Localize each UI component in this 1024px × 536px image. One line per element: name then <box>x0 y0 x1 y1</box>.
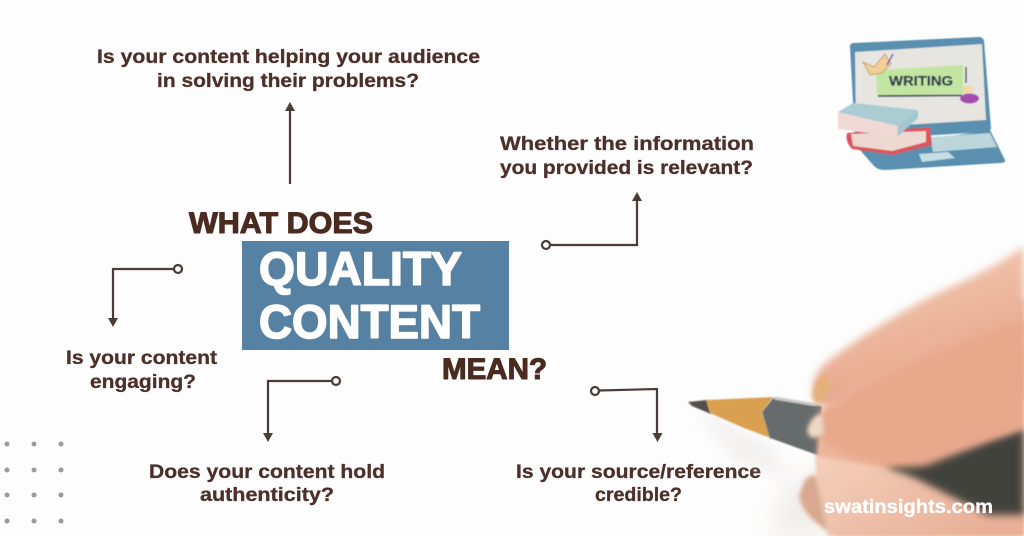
middle finger and hand back <box>810 320 1024 467</box>
arrow: to authenticity <box>263 377 340 442</box>
paper shadow below hand <box>770 470 830 536</box>
question: relevant information <box>500 134 754 179</box>
blue book pages <box>838 112 898 137</box>
red book <box>847 127 932 155</box>
heading: mean: MEAN? <box>442 353 547 386</box>
question: credible source: credible? <box>595 485 682 506</box>
pencil body <box>762 398 822 456</box>
middle fingernail <box>807 414 824 438</box>
index finger <box>813 246 1024 408</box>
panel: quality content: CONTENT <box>259 295 480 348</box>
question: authenticity <box>149 462 385 506</box>
finger crease <box>828 300 1024 408</box>
arrow: to engaging <box>108 265 182 327</box>
arrow: up to helping audience <box>285 102 295 184</box>
pencil highlight <box>774 398 816 405</box>
website label: swatinsights.com <box>824 497 993 518</box>
ink pot <box>960 94 979 104</box>
question: authenticity: Does your content hold <box>149 462 385 483</box>
hand base <box>816 300 1024 536</box>
dark pencil shaft <box>885 428 1024 515</box>
question: credible source: Is your source/reference <box>516 462 761 483</box>
panel: quality content <box>242 241 509 350</box>
question: authenticity: authenticity? <box>200 485 334 506</box>
heading: what does: WHAT DOES <box>189 207 373 240</box>
small book <box>863 54 891 75</box>
question: engaging: Is your content <box>66 348 218 369</box>
arrow: to credible source <box>591 387 662 442</box>
keyboard <box>930 133 997 152</box>
question: engaging <box>66 348 218 393</box>
question: engaging: engaging? <box>90 372 196 393</box>
screen <box>855 44 986 128</box>
index fingernail <box>813 374 832 404</box>
pencil wood <box>706 397 773 438</box>
arrow: to relevant information <box>542 192 642 249</box>
panel: quality content: QUALITY <box>259 242 462 295</box>
question: helping audience: in solving their problems? <box>157 71 419 92</box>
icon: laptop with books <box>838 37 1005 170</box>
pencil tip <box>688 400 711 414</box>
question: credible source <box>516 462 761 506</box>
screen frame <box>850 37 991 140</box>
trackpad <box>919 152 955 162</box>
image: hand holding pencil <box>688 246 1024 536</box>
thumb <box>816 456 1024 536</box>
question: helping audience <box>97 47 480 92</box>
blue book cover <box>838 103 918 126</box>
laptop base <box>860 130 1005 170</box>
question: relevant information: Whether the information <box>500 134 754 155</box>
icon: laptop with books: WRITING <box>889 72 953 88</box>
decorative dot grid <box>4 442 64 524</box>
writing label <box>876 65 963 96</box>
thumb nail <box>799 476 827 530</box>
question: helping audience: Is your content helping your audience <box>97 47 480 68</box>
question: relevant information: you provided is relevant? <box>500 158 753 179</box>
pencil shadow <box>695 408 790 480</box>
